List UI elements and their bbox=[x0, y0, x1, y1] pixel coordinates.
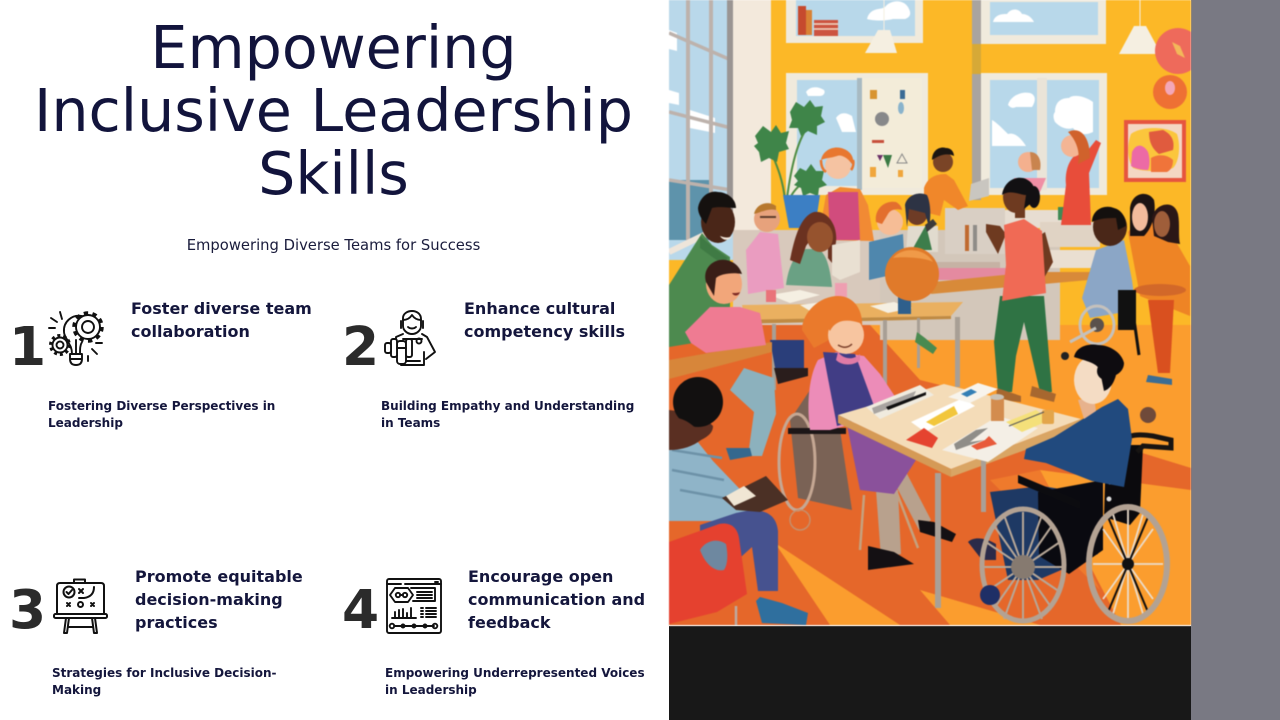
icon: lightbulb with gears bbox=[48, 311, 104, 366]
subtitle: Empowering Diverse Teams for Success bbox=[187, 237, 480, 254]
item 2: enhance cultural competency skills bbox=[342, 299, 634, 430]
icon: person with dumbbell bbox=[384, 310, 436, 366]
heading bbox=[464, 299, 625, 341]
number 1: 1 bbox=[9, 315, 46, 378]
file cabinet bbox=[832, 240, 860, 280]
number 2: 2 bbox=[342, 315, 379, 378]
seated ginger woman in wheelchair bbox=[779, 296, 956, 570]
heading bbox=[131, 299, 312, 341]
red chair bbox=[669, 524, 747, 626]
heading: Encourage open bbox=[468, 567, 613, 586]
back table bbox=[735, 247, 963, 390]
title: Skills bbox=[258, 140, 409, 208]
middle windows with poster bbox=[786, 73, 1107, 195]
heading: communication and bbox=[468, 590, 645, 609]
description: Strategies for Inclusive Decision- bbox=[52, 666, 277, 680]
back wall base and counters bbox=[733, 207, 1113, 340]
white pillar bbox=[733, 0, 771, 240]
yellow wall bbox=[669, 0, 1191, 340]
front boy with tablet bbox=[669, 377, 808, 625]
standing woman in coral shirt bbox=[986, 178, 1056, 402]
item 1: foster diverse team collaboration bbox=[9, 299, 312, 430]
description: in Teams bbox=[381, 416, 440, 430]
icon: dashboard window bbox=[386, 578, 442, 634]
illustration: inclusive classroom bbox=[668, 0, 1192, 627]
heading: feedback bbox=[468, 613, 550, 632]
black band below illustration bbox=[669, 626, 1191, 720]
title bbox=[34, 14, 633, 208]
description: Fostering Diverse Perspectives in bbox=[48, 399, 275, 413]
item 4: encourage open communication and feedback bbox=[342, 567, 645, 697]
description: Making bbox=[52, 683, 101, 697]
heading: Promote equitable bbox=[135, 567, 303, 586]
description: in Leadership bbox=[385, 683, 477, 697]
man in green sweater bbox=[669, 192, 736, 347]
description bbox=[48, 399, 275, 430]
title: Inclusive Leadership bbox=[34, 77, 633, 145]
girl in green sweater with long hair bbox=[786, 212, 836, 287]
heading: Enhance cultural bbox=[464, 299, 615, 318]
right side group with wheelchair bbox=[1061, 194, 1190, 385]
grey side panel bbox=[1191, 0, 1280, 720]
heading: collaboration bbox=[131, 322, 250, 341]
heading bbox=[135, 567, 303, 632]
heading: Foster diverse team bbox=[131, 299, 312, 318]
description bbox=[52, 666, 277, 697]
heading: decision-making bbox=[135, 590, 283, 609]
boy in blue shirt bbox=[869, 202, 905, 280]
item 3: promote equitable decision-making practices bbox=[9, 567, 303, 697]
number 4: 4 bbox=[342, 578, 379, 641]
left tall window bbox=[669, 0, 735, 260]
wall art bbox=[1124, 28, 1201, 182]
description: Empowering Underrepresented Voices bbox=[385, 666, 645, 680]
front man in wheelchair bbox=[968, 344, 1171, 622]
description bbox=[381, 399, 634, 430]
description: Leadership bbox=[48, 416, 123, 430]
bottom edge highlight bbox=[669, 625, 1191, 626]
left desk and seated boy bbox=[669, 260, 808, 460]
ceiling lamps bbox=[865, 0, 1161, 54]
upper windows bbox=[786, 0, 1106, 200]
person in orange shirt bbox=[924, 148, 989, 216]
plant bbox=[754, 100, 827, 228]
person in pink hoodie with glasses bbox=[746, 203, 784, 294]
number 3: 3 bbox=[9, 578, 46, 641]
title: Empowering bbox=[150, 14, 517, 82]
ginger woman standing with plant bbox=[818, 148, 874, 241]
heading bbox=[468, 567, 645, 632]
heading: competency skills bbox=[464, 322, 625, 341]
description: Building Empathy and Understanding bbox=[381, 399, 634, 413]
description bbox=[385, 666, 645, 697]
floor bbox=[669, 325, 1191, 626]
window figures bbox=[1014, 130, 1101, 225]
girl with dark cap bbox=[905, 193, 938, 252]
icon: strategy whiteboard bbox=[53, 578, 108, 634]
heading: practices bbox=[135, 613, 218, 632]
front table with papers bbox=[838, 383, 1081, 608]
